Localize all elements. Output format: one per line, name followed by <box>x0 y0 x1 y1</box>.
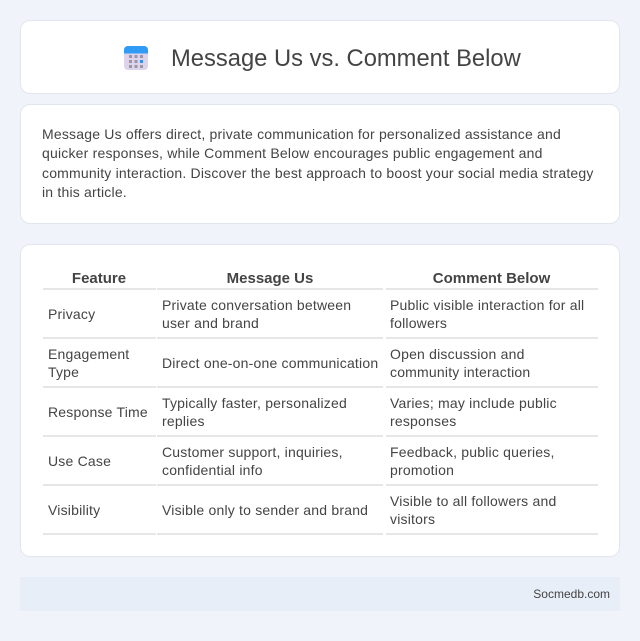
row: engagement type: Engagement <box>48 346 129 362</box>
row: privacy: Private conversation between <box>162 297 351 313</box>
row: visibility: Visibility <box>48 502 100 518</box>
intro paragraph <box>42 126 594 200</box>
row: use case: promotion <box>390 462 454 478</box>
row: visibility: Visible only to sender and brand <box>162 502 368 518</box>
row: use case: Use Case <box>48 453 111 469</box>
row: use case <box>48 444 555 478</box>
row: use case: confidential info <box>162 462 263 478</box>
footer source text: Socmedb.com <box>533 587 610 601</box>
intro paragraph: community interaction. Discover the best approach to boost your social media strategy <box>42 165 594 181</box>
row: visibility <box>48 493 556 527</box>
row: privacy: Public visible interaction for all <box>390 297 584 313</box>
intro paragraph: quicker responses, while Comment Below encourages public engagement and <box>42 145 543 161</box>
row: response time: Varies; may include public <box>390 395 557 411</box>
comparison table panel <box>20 244 620 557</box>
row: engagement type <box>48 346 530 380</box>
row: engagement type: Open discussion and <box>390 346 525 362</box>
row: visibility: Visible to all followers and <box>390 493 556 509</box>
row: engagement type: Direct one-on-one communication <box>162 355 378 371</box>
row: privacy: Privacy <box>48 306 95 322</box>
heading: Message Us vs. Comment Below <box>171 45 521 72</box>
intro text panel <box>20 104 620 224</box>
footer bar <box>20 577 620 611</box>
row: engagement type: community interaction <box>390 364 530 380</box>
table header: Comment Below <box>433 270 550 287</box>
row: privacy: user and brand <box>162 315 259 331</box>
row: privacy: followers <box>390 315 447 331</box>
row: privacy <box>48 297 584 331</box>
row: use case: Feedback, public queries, <box>390 444 555 460</box>
intro paragraph: Message Us offers direct, private communication for personalized assistance and <box>42 126 561 142</box>
row: response time <box>48 395 557 429</box>
table header <box>72 270 550 287</box>
title panel <box>20 20 620 94</box>
row: engagement type: Type <box>48 364 79 380</box>
row: use case: Customer support, inquiries, <box>162 444 343 460</box>
row: response time: responses <box>390 413 456 429</box>
table header: Message Us <box>227 270 313 287</box>
intro paragraph: in this article. <box>42 184 127 200</box>
table header: Feature <box>72 270 126 287</box>
row: response time: Response Time <box>48 404 148 420</box>
row: response time: replies <box>162 413 205 429</box>
icon: calendar <box>124 46 148 70</box>
row: response time: Typically faster, personalized <box>162 395 347 411</box>
row: visibility: visitors <box>390 511 435 527</box>
